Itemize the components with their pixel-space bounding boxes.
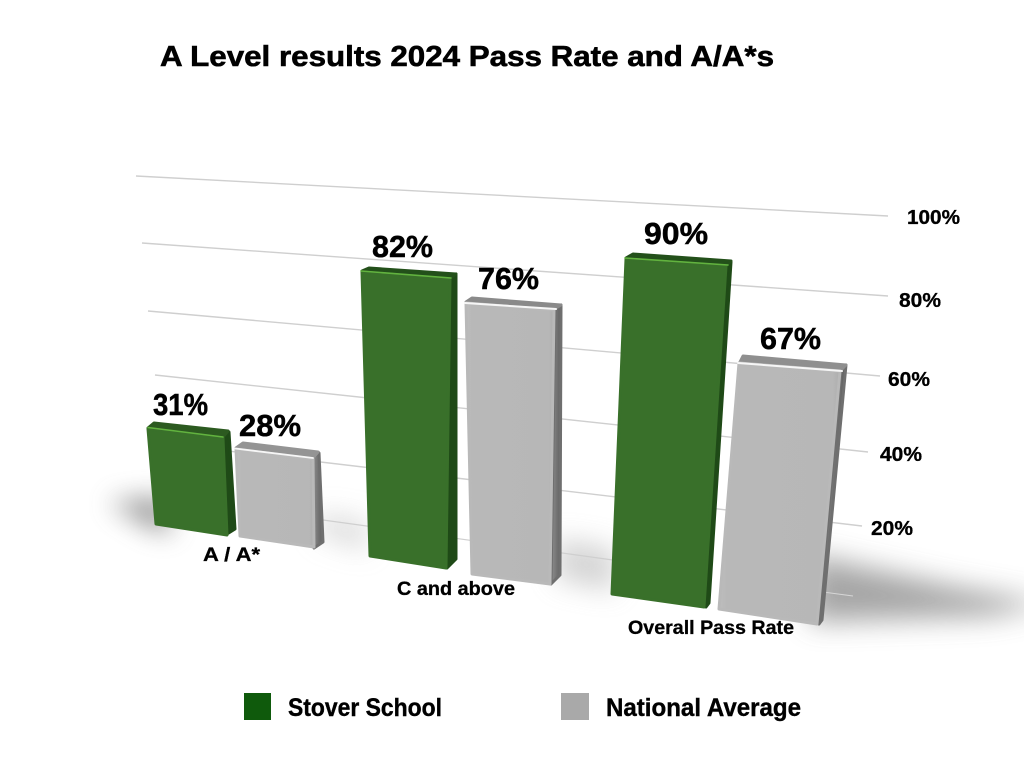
axis labels: 100% xyxy=(907,207,960,229)
axis labels: 60% xyxy=(888,369,930,391)
value labels: 76% xyxy=(478,261,539,296)
category labels: Overall Pass Rate xyxy=(628,618,794,639)
axis labels xyxy=(871,207,960,540)
bar: C and above National Average 76% xyxy=(465,298,561,584)
bar: A / A* Stover School 31% xyxy=(148,423,235,535)
legend label: Stover School: Stover School xyxy=(288,694,442,722)
value labels: 31% xyxy=(153,387,208,422)
category labels xyxy=(203,545,794,639)
value labels xyxy=(153,216,821,443)
category labels: C and above xyxy=(397,579,515,600)
title: A Level results 2024 Pass Rate and A/A*s xyxy=(160,41,774,73)
axis labels: 80% xyxy=(899,290,941,312)
legend swatch: National Average xyxy=(561,693,589,720)
value labels: 28% xyxy=(239,408,301,443)
legend swatch: Stover School xyxy=(244,693,271,720)
bar: A / A* National Average 28% xyxy=(235,443,323,548)
value labels: 67% xyxy=(760,321,821,356)
value labels: 82% xyxy=(372,229,433,264)
bar: Overall Pass Rate Stover School 90% xyxy=(612,254,731,607)
legend xyxy=(244,693,801,722)
value labels: 90% xyxy=(644,216,708,251)
legend label: National Average: National Average xyxy=(606,694,801,722)
bar: C and above Stover School 82% xyxy=(361,268,456,568)
bar: Overall Pass Rate National Average 67% xyxy=(719,356,846,624)
floor shadow xyxy=(108,496,1024,622)
category labels: A / A* xyxy=(203,545,261,566)
baseline gridline xyxy=(323,520,853,596)
chart gridlines xyxy=(136,176,888,526)
axis labels: 20% xyxy=(871,518,913,540)
axis labels: 40% xyxy=(880,444,922,466)
